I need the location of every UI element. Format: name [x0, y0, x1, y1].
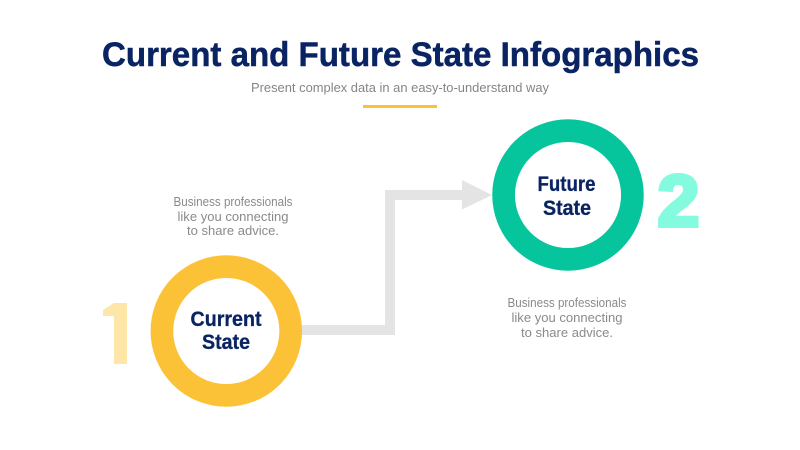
text block: current state description: like you connecting	[178, 210, 289, 224]
label: current state: State	[202, 331, 250, 354]
accent underline	[363, 105, 437, 108]
text block: future state description: like you connecting	[512, 311, 623, 325]
label: future state	[538, 173, 596, 220]
number 1: 1	[101, 297, 137, 378]
label: current state	[190, 308, 262, 354]
text block: future state description: Business professionals	[508, 296, 626, 310]
circle: future state	[504, 131, 632, 259]
text block: future state description: to share advice.	[521, 326, 613, 340]
label: future state: Future	[538, 173, 596, 196]
arrow: current to future	[300, 180, 492, 335]
text block: current state description: Business professionals	[174, 195, 292, 209]
title: Current and Future State Infographics	[102, 36, 699, 74]
text block: future state description	[508, 296, 626, 340]
number 2: 2	[658, 161, 700, 242]
text block: current state description: to share advice.	[187, 224, 279, 238]
text block: current state description	[174, 195, 292, 238]
circle: current state	[162, 267, 291, 395]
label: current state: Current	[190, 308, 262, 331]
subtitle: Present complex data in an easy-to-understand way	[251, 80, 549, 95]
label: future state: State	[543, 197, 591, 220]
